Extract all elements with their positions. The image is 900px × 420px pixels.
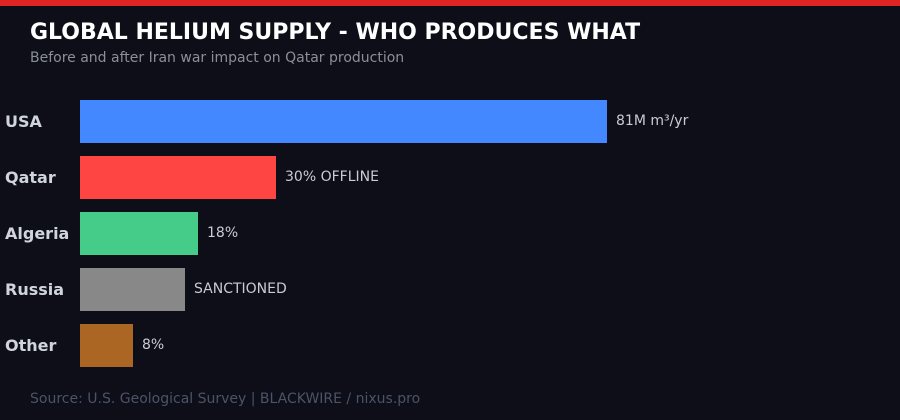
source footer: Source: U.S. Geological Survey | BLACKWIRE / nixus.pro: [30, 391, 420, 407]
row: Algeria: 18%: [207, 225, 238, 241]
row: Algeria: [5, 212, 238, 255]
row: Other: 8%: [142, 337, 164, 353]
row: Qatar: 30% OFFLINE: [285, 169, 379, 185]
bar chart: [5, 100, 688, 367]
row: Qatar: Qatar: [5, 168, 56, 187]
row: Russia: SANCTIONED: [194, 281, 287, 297]
row: USA: 81M m³/yr: [616, 113, 688, 129]
row: Qatar: [5, 156, 379, 199]
row: Russia: Russia: [5, 280, 64, 299]
row: USA: [5, 100, 688, 143]
row: Algeria: Algeria: [5, 224, 69, 243]
row: USA: USA: [5, 112, 42, 131]
row: Other: [5, 324, 164, 367]
row: Russia: [5, 268, 287, 311]
top accent bar: [0, 0, 900, 6]
row: Other: Other: [5, 336, 56, 355]
subtitle: Before and after Iran war impact on Qatar production: [30, 50, 404, 66]
title: GLOBAL HELIUM SUPPLY - WHO PRODUCES WHAT: [30, 20, 640, 45]
